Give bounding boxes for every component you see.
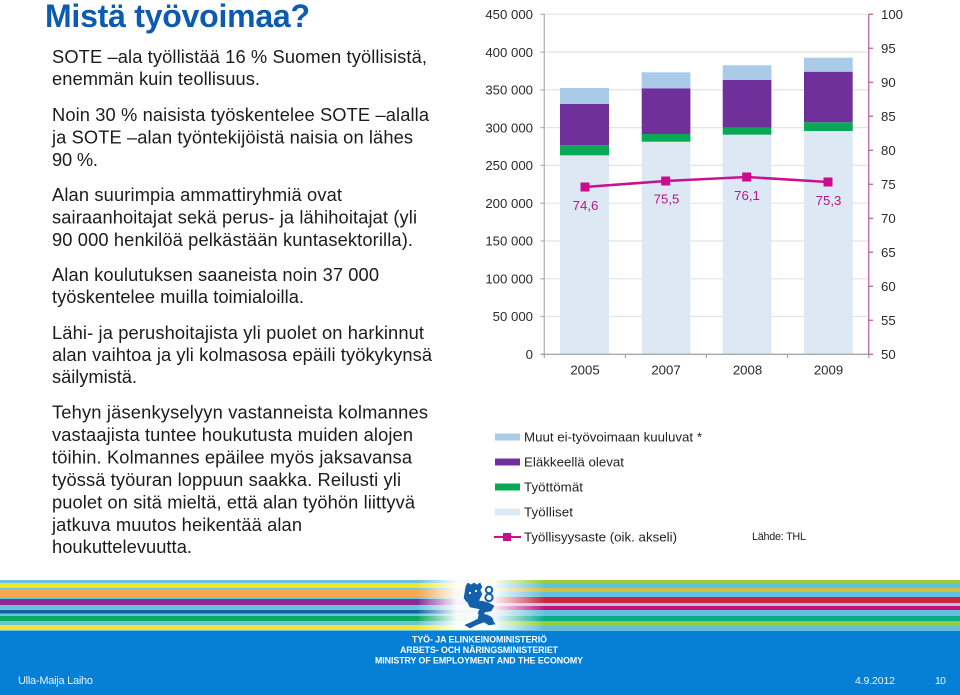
legend item: Muut ei-työvoimaan kuuluvat: Muut ei-työvoimaan kuuluvat *	[524, 430, 702, 444]
legend	[494, 430, 702, 544]
year labels: 2005	[570, 362, 600, 378]
source note: Lähde: THL	[752, 531, 806, 543]
year labels: 2008	[733, 362, 762, 378]
footer: date: 4.9.2012	[855, 675, 895, 687]
right axis labels: 100	[881, 7, 903, 22]
line value labels: 75,5	[654, 192, 679, 206]
right axis labels: 95	[881, 41, 896, 56]
paragraph: graduates in other fields: työskentelee muilla toimialoilla.	[52, 286, 304, 307]
tail and rear legs	[465, 614, 495, 628]
paragraph: considering change of field: Lähi- ja perushoitajista yli puolet on harkinnut	[52, 322, 424, 343]
left axis labels: 100 000	[485, 272, 533, 286]
left axis labels: 250 000	[485, 158, 533, 173]
footer: author: Ulla-Maija Laiho	[18, 675, 93, 687]
line value labels	[573, 188, 841, 213]
line: employment rate	[580, 172, 832, 192]
left axis labels: 350 000	[485, 83, 533, 98]
crown and head	[464, 583, 482, 604]
bar: 2008	[723, 65, 771, 354]
paragraph: Tehyn survey: Tehyn jäsenkyselyyn vastanneista kolmannes	[52, 402, 428, 422]
footer: page number: 10	[935, 675, 946, 687]
paragraph: largest occupational groups: sairaanhoitajat sekä perus- ja lähihoitajat (yli	[52, 206, 417, 228]
paragraph: Tehyn survey: vastaajista tuntee houkutusta muiden alojen	[52, 424, 413, 445]
stripes: right	[480, 580, 960, 631]
legend item: Työllisyysaste: Työllisyysaste (oik. akseli)	[524, 530, 677, 544]
legend item: Työlliset	[495, 504, 573, 520]
bar: 2005	[560, 88, 609, 354]
sword arm ring	[485, 587, 493, 601]
ministry name: ARBETS- OCH NÄRINGSMINISTERIET	[400, 645, 559, 655]
mane details	[469, 592, 471, 594]
paragraph: women in SOTE: 90 %.	[52, 149, 98, 170]
bottom axis	[540, 354, 869, 358]
paragraph: considering change of field: säilymistä.	[52, 366, 137, 387]
stripes: left	[0, 580, 480, 631]
paragraph: SOTE share of employment	[52, 46, 427, 89]
line value labels: 76,1	[734, 188, 760, 203]
paragraph: Tehyn survey: töihin. Kolmannes epäilee myös jaksavansa	[52, 446, 413, 468]
paragraph: SOTE share of employment: SOTE –ala työllistää 16 % Suomen työllisistä,	[52, 46, 427, 67]
right axis labels: 70	[881, 211, 896, 226]
left axis labels: 300 000	[485, 120, 533, 135]
paragraph: largest occupational groups	[52, 184, 417, 250]
paragraph: considering change of field: alan vaihtoa ja yli kolmasosa epäili työkykynsä	[52, 344, 433, 365]
ministry name: MINISTRY OF EMPLOYMENT AND THE ECONOMY	[375, 656, 583, 666]
left axis labels: 200 000	[485, 196, 533, 211]
bar: 2009	[804, 58, 853, 354]
right axis labels: 60	[881, 279, 896, 294]
right axis labels: 80	[881, 143, 896, 158]
left axis labels: 400 000	[485, 45, 533, 60]
legend item: Työttömät	[495, 480, 583, 494]
ministry name	[375, 634, 583, 666]
paragraph: graduates in other fields: Alan koulutuksen saaneista noin 37 000	[52, 264, 379, 285]
line value labels: 74,6	[573, 198, 598, 213]
paragraph: considering change of field	[52, 322, 433, 387]
paragraph: SOTE share of employment: enemmän kuin teollisuus.	[52, 68, 260, 89]
right axis labels: 50	[881, 347, 896, 362]
paragraph: Tehyn survey: puolet on sitä mieltä, että alan työhön liittyvä	[52, 492, 416, 512]
year labels	[570, 362, 843, 378]
paragraph: graduates in other fields	[52, 264, 379, 307]
legend item: Eläkkeellä olevat: Eläkkeellä olevat	[524, 454, 624, 470]
ministry name: TYÖ- JA ELINKEINOMINISTERIÖ	[412, 634, 547, 644]
paragraph: women in SOTE: Noin 30 % naisista työskentelee SOTE –alalla	[52, 104, 430, 125]
paragraph: largest occupational groups: Alan suurimpia ammattiryhmiä ovat	[52, 184, 342, 205]
paragraph: Tehyn survey	[51, 402, 428, 557]
right axis labels: 55	[881, 313, 896, 328]
paragraph: women in SOTE	[51, 104, 430, 170]
right axis labels: 90	[881, 75, 896, 90]
right axis labels: 75	[881, 177, 896, 192]
right axis labels: 85	[881, 109, 896, 124]
legend item: Työttömät: Työttömät	[524, 480, 583, 494]
right axis	[869, 14, 873, 355]
footer band	[0, 580, 960, 695]
left axis labels: 50 000	[493, 309, 533, 324]
paragraph: Tehyn survey: työssä työuran loppuun saakka. Reilusti yli	[52, 469, 401, 490]
left axis labels: 450 000	[485, 7, 533, 22]
left axis	[540, 14, 544, 355]
icon: Finnish lion emblem	[464, 583, 495, 628]
body	[468, 601, 494, 618]
paragraph: Tehyn survey: houkuttelevuutta.	[52, 536, 192, 557]
legend item: Työlliset: Työlliset	[524, 504, 573, 520]
paragraph: Tehyn survey: jatkuva muutos heikentää alan	[51, 514, 302, 535]
chart: stacked bars with employment rate line	[485, 7, 903, 378]
line value labels: 75,3	[816, 193, 841, 208]
year labels: 2007	[651, 362, 681, 378]
left axis labels	[485, 7, 533, 362]
left axis labels: 0	[526, 347, 533, 362]
paragraph: largest occupational groups: 90 000 henkilöä pelkästään kuntasektorilla).	[52, 229, 413, 250]
bar: 2007	[642, 72, 690, 354]
right axis labels	[881, 7, 903, 362]
year labels: 2009	[814, 362, 843, 378]
paragraph: women in SOTE: ja SOTE –alan työntekijöistä naisia on lähes	[51, 126, 413, 148]
right axis labels: 65	[881, 245, 896, 260]
left axis labels: 150 000	[485, 234, 533, 249]
text block: body paragraphs	[51, 46, 433, 557]
